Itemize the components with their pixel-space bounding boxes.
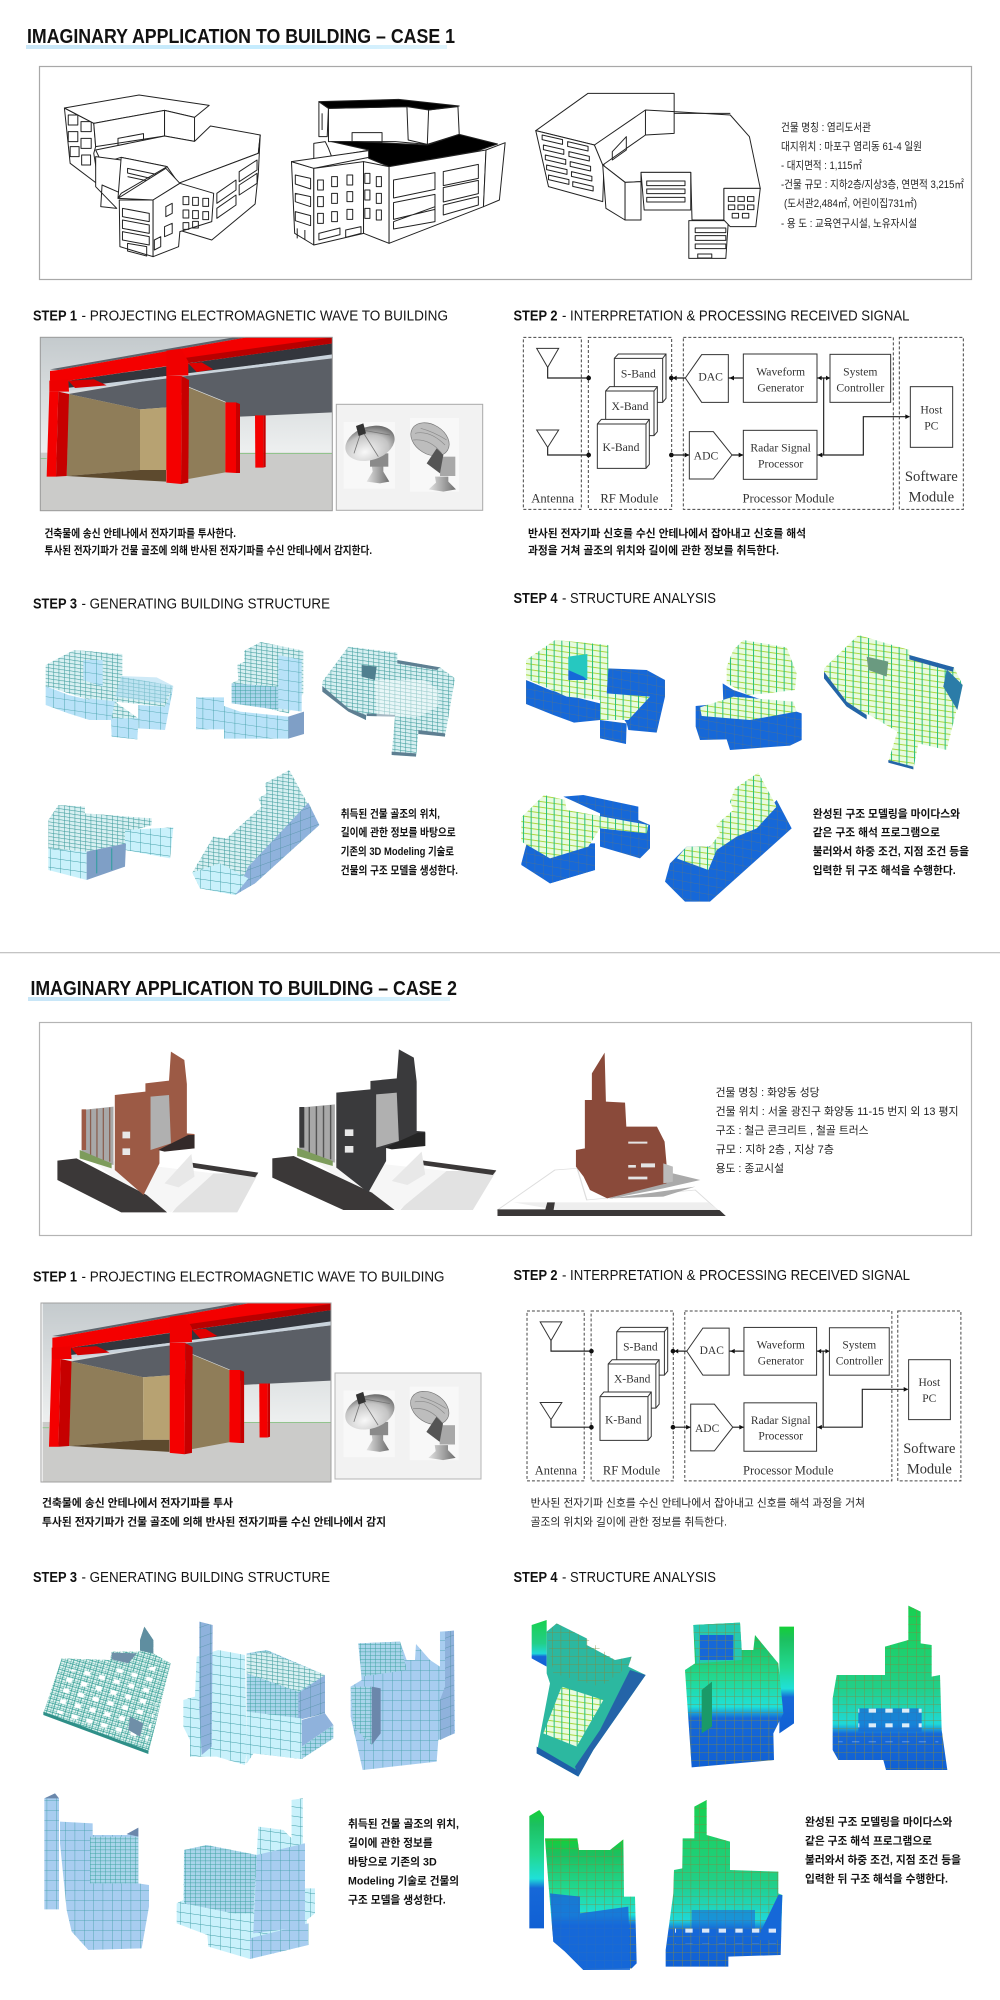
analysis view two (696, 640, 802, 750)
case 2 step 3 description: Modeling 기술로 건물의 (348, 1874, 459, 1888)
case 2 step 3 description: 구조 모델을 생성한다. (348, 1892, 446, 1906)
building information text: - 대지면적 : 1,115㎡ (781, 159, 862, 172)
analysis view five (666, 1800, 782, 1967)
case 2 step 3 heading: - GENERATING BUILDING STRUCTURE (82, 1569, 330, 1586)
case 1 step 3 description: 건물의 구조 모델을 생성한다. (341, 863, 458, 877)
building information text (716, 1086, 959, 1175)
case 2 step 2 radar block diagram: Processor (758, 1431, 803, 1443)
building information text: -건물 규모 : 지하2층/지상3층, 연면적 3,215㎡ (781, 177, 964, 191)
case 1 step 2 radar block diagram: DAC (698, 371, 723, 384)
case 2 step 2 description (531, 1496, 865, 1528)
case 2 step 2 radar block diagram: Radar Signal (751, 1415, 811, 1427)
case 2 step 2 radar block diagram: Software (903, 1441, 955, 1457)
case 1 step 2 heading: STEP 2 (514, 308, 558, 325)
case 1 step 2 radar block diagram: Controller (836, 381, 884, 394)
building information text: 건물 위치 : 서울 광진구 화양동 11-15 번지 외 13 평지 (716, 1105, 959, 1118)
case 2 step 4 heading (514, 1569, 716, 1586)
case 2 step 2 radar block diagram: System (842, 1339, 876, 1352)
case 2 step 2 description: 반사된 전자기파 신호를 수신 안테나에서 잡아내고 신호를 해석 과정을 거쳐 (531, 1496, 865, 1510)
model view five (192, 770, 319, 895)
case 1 step 4 heading (514, 590, 716, 607)
case 2 step 2 radar block diagram: X-Band (614, 1374, 651, 1386)
case 2 step 2 radar block diagram: Host (918, 1377, 941, 1389)
case 1 step 1 description: 투사된 전자기파가 건물 골조에 의해 반사된 전자기파를 수신 안테나에서 감지한다. (44, 543, 372, 557)
case 1 step 2 radar block diagram: Generator (757, 381, 804, 394)
case 2 step 2 heading: STEP 2 (514, 1267, 558, 1284)
case 2 step 3 description: 취득된 건물 골조의 위치, (348, 1816, 459, 1830)
case 1 step 4 heading: - STRUCTURE ANALYSIS (562, 590, 716, 607)
case 2 step 3 structure models (43, 1622, 455, 1959)
case 1 step 2 radar block diagram: PC (924, 419, 939, 432)
case 2 step 1 description (42, 1496, 386, 1528)
case 1 step 1 antenna dishes panel (336, 404, 483, 510)
case 1 step 2 radar block diagram: Antenna (531, 492, 574, 506)
case 1 step 3 description: 기존의 3D Modeling 기술로 (341, 844, 454, 858)
case 2 step 2 radar block diagram: Generator (758, 1355, 804, 1367)
case 2 step 2 radar block diagram: PC (922, 1393, 937, 1405)
line drawing: building view one (64, 95, 260, 257)
case 1 step 4 description: 불러와서 하중 조건, 지점 조건 등을 (813, 845, 969, 858)
building information text: (도서관2,484㎡, 어린이집731㎡) (784, 197, 917, 210)
case 1 step 4 description: 완성된 구조 모델링을 마이다스와 (813, 806, 960, 820)
title: case 2: IMAGINARY APPLICATION TO BUILDING – CASE 2 (30, 978, 457, 1000)
case 2 step 4 description: 완성된 구조 모델링을 마이다스와 (805, 1814, 952, 1828)
analysis view four (521, 795, 650, 883)
case 2 step 3 description: 길이에 관한 정보를 (348, 1836, 433, 1850)
case 1 step 3 description (341, 806, 458, 877)
model view one (46, 650, 173, 739)
case 1 step 2 description (528, 526, 806, 557)
case 1 step 2 description: 과정을 거쳐 골조의 위치와 길이에 관한 정보를 취득한다. (528, 543, 779, 557)
case 2 step 2 radar block diagram: Controller (836, 1355, 883, 1367)
rendering: brick tower view (497, 1053, 726, 1216)
case 1 step 2 radar block diagram: Software (905, 469, 958, 485)
case 2 step 4 heading: STEP 4 (514, 1569, 558, 1586)
case 2 step 4 description: 입력한 뒤 구조 해석을 수행한다. (805, 1872, 948, 1886)
case 1 step 4 description: 같은 구조 해석 프로그램으로 (813, 826, 940, 839)
case 2 step 2 radar block diagram: DAC (700, 1345, 724, 1357)
case 2 step 4 description: 불러와서 하중 조건, 지점 조건 등을 (805, 1854, 961, 1866)
analysis view two (685, 1623, 794, 1767)
case 2 step 1 heading: - PROJECTING ELECTROMAGNETIC WAVE TO BUILDING (82, 1269, 444, 1286)
case 1 step 4 analysis models (521, 635, 963, 902)
case 1 step 2 radar block diagram: S-Band (621, 367, 656, 380)
case 1 step 2 description: 반사된 전자기파 신호를 수신 안테나에서 잡아내고 신호를 해석 (528, 526, 806, 540)
case 1 step 2 radar block diagram: ADC (694, 450, 719, 463)
case 2 step 1 antenna dishes panel (335, 1373, 481, 1479)
model view two (196, 642, 304, 739)
case 1 step 2 radar block diagram: K-Band (603, 441, 640, 454)
analysis view three (824, 635, 963, 769)
case 1 step 2 heading: - INTERPRETATION & PROCESSING RECEIVED SIGNAL (562, 308, 910, 325)
model view three (322, 647, 455, 757)
case 1 step 2 radar block diagram: Host (920, 403, 943, 416)
case 2 step 4 description: 같은 구조 해석 프로그램으로 (805, 1834, 932, 1848)
case 1 step 2 radar block diagram (523, 337, 963, 509)
case 1 step 1 description (44, 526, 372, 557)
case 1 step 3 structure models (46, 642, 455, 895)
case 2 step 2 radar block diagram: S-Band (623, 1341, 658, 1353)
case 1 step 2 radar block diagram: Processor Module (742, 492, 835, 506)
case 2 step 2 radar block diagram: RF Module (603, 1463, 661, 1477)
case 2 step 2 radar block diagram: Waveform (757, 1339, 805, 1352)
case 2 step 2 description: 골조의 위치와 길이에 관한 정보를 취득한다. (531, 1516, 727, 1528)
case 1 step 1 description: 건축물에 송신 안테나에서 전자기파를 투사한다. (44, 526, 236, 540)
case 1 step 4 heading: STEP 4 (514, 590, 558, 607)
case 2 step 2 heading: - INTERPRETATION & PROCESSING RECEIVED SIGNAL (562, 1267, 910, 1284)
model view one (43, 1627, 171, 1754)
case 2 step 3 heading: STEP 3 (33, 1569, 77, 1586)
case 1 step 2 radar block diagram: Radar Signal (750, 442, 811, 455)
case 1 step 2 radar block diagram: Module (909, 490, 954, 506)
title: case 1: IMAGINARY APPLICATION TO BUILDING – CASE 1 (27, 26, 455, 48)
case 1 step 4 description: 입력한 뒤 구조 해석을 수행한다. (813, 863, 956, 877)
case 1 step 3 description: 길이에 관한 정보를 바탕으로 (341, 825, 456, 839)
case 2 step 2 radar block diagram: K-Band (605, 1414, 642, 1426)
building information text: 건물 명칭 : 화양동 성당 (716, 1086, 820, 1099)
panel: case 1 overview (40, 66, 972, 280)
case 2 step 2 radar block diagram: ADC (695, 1423, 720, 1435)
analysis view five (665, 773, 792, 902)
case 1 step 3 heading: - GENERATING BUILDING STRUCTURE (82, 595, 330, 612)
case 1 step 1 heading: - PROJECTING ELECTROMAGNETIC WAVE TO BUILDING (82, 308, 448, 325)
case 2 step 4 description (805, 1814, 961, 1886)
case 2 step 2 radar block diagram: Module (907, 1461, 952, 1477)
case 2 step 2 radar block diagram: Antenna (535, 1463, 578, 1477)
analysis view four (529, 1810, 637, 1970)
case 2 step 2 radar block diagram: Processor Module (743, 1463, 834, 1477)
case 2 step 1 description: 건축물에 송신 안테나에서 전자기파를 투사 (42, 1496, 233, 1510)
analysis view three (833, 1606, 947, 1770)
line drawing: building view two with black roof (291, 99, 505, 245)
model view two (183, 1622, 333, 1765)
case 1 step 2 radar block diagram: RF Module (600, 492, 659, 506)
model view four (44, 1793, 149, 1950)
building information text: 용도 : 종교시설 (716, 1162, 784, 1175)
line drawing: building view three (536, 93, 760, 258)
case 2 step 4 heading: - STRUCTURE ANALYSIS (562, 1569, 716, 1586)
model view five (177, 1798, 315, 1959)
case 1 step 3 heading: STEP 3 (33, 595, 77, 612)
case 2 step 2 radar block diagram (527, 1311, 961, 1481)
model view four (48, 805, 173, 880)
building information text: 규모 : 지하 2층 , 지상 7층 (716, 1142, 834, 1156)
case 1 step 3 description: 취득된 건물 골조의 위치, (341, 806, 440, 820)
model view three (351, 1631, 455, 1770)
case 2 step 1 description: 투사된 전자기파가 건물 골조에 의해 반사된 전자기파를 수신 안테나에서 감지 (42, 1514, 386, 1528)
building information text: 대지위치 : 마포구 염리동 61-4 일원 (781, 139, 922, 153)
case 2 step 3 description (348, 1816, 459, 1906)
case 2 step 1 building scene image (41, 1303, 337, 1482)
building information text: - 용 도 : 교육연구시설, 노유자시설 (781, 217, 917, 230)
analysis view one (532, 1620, 646, 1777)
case 2 step 4 analysis models (529, 1606, 947, 1970)
case 1 step 2 radar block diagram: Processor (758, 458, 803, 471)
case 1 step 1 heading: STEP 1 (33, 308, 77, 325)
panel: case 2 overview (40, 1022, 972, 1236)
building information text: 구조 : 철근 콘크리트 , 철골 트러스 (716, 1124, 869, 1137)
case 1 step 2 radar block diagram: X-Band (612, 400, 649, 413)
case 1 step 1 building scene image (40, 337, 332, 511)
case 2 step 3 description: 바탕으로 기존의 3D (348, 1854, 437, 1868)
building information text (781, 121, 964, 230)
case 1 step 2 radar block diagram: Waveform (756, 365, 805, 378)
case 1 step 2 radar block diagram: System (843, 365, 877, 378)
case 2 step 1 heading: STEP 1 (33, 1269, 77, 1286)
rendering: dark building silhouette (272, 1049, 496, 1210)
rendering: brick church front view (57, 1052, 258, 1212)
case 1 step 4 description (813, 806, 969, 877)
analysis view one (526, 640, 665, 744)
building information text: 건물 명칭 : 염리도서관 (781, 121, 871, 134)
